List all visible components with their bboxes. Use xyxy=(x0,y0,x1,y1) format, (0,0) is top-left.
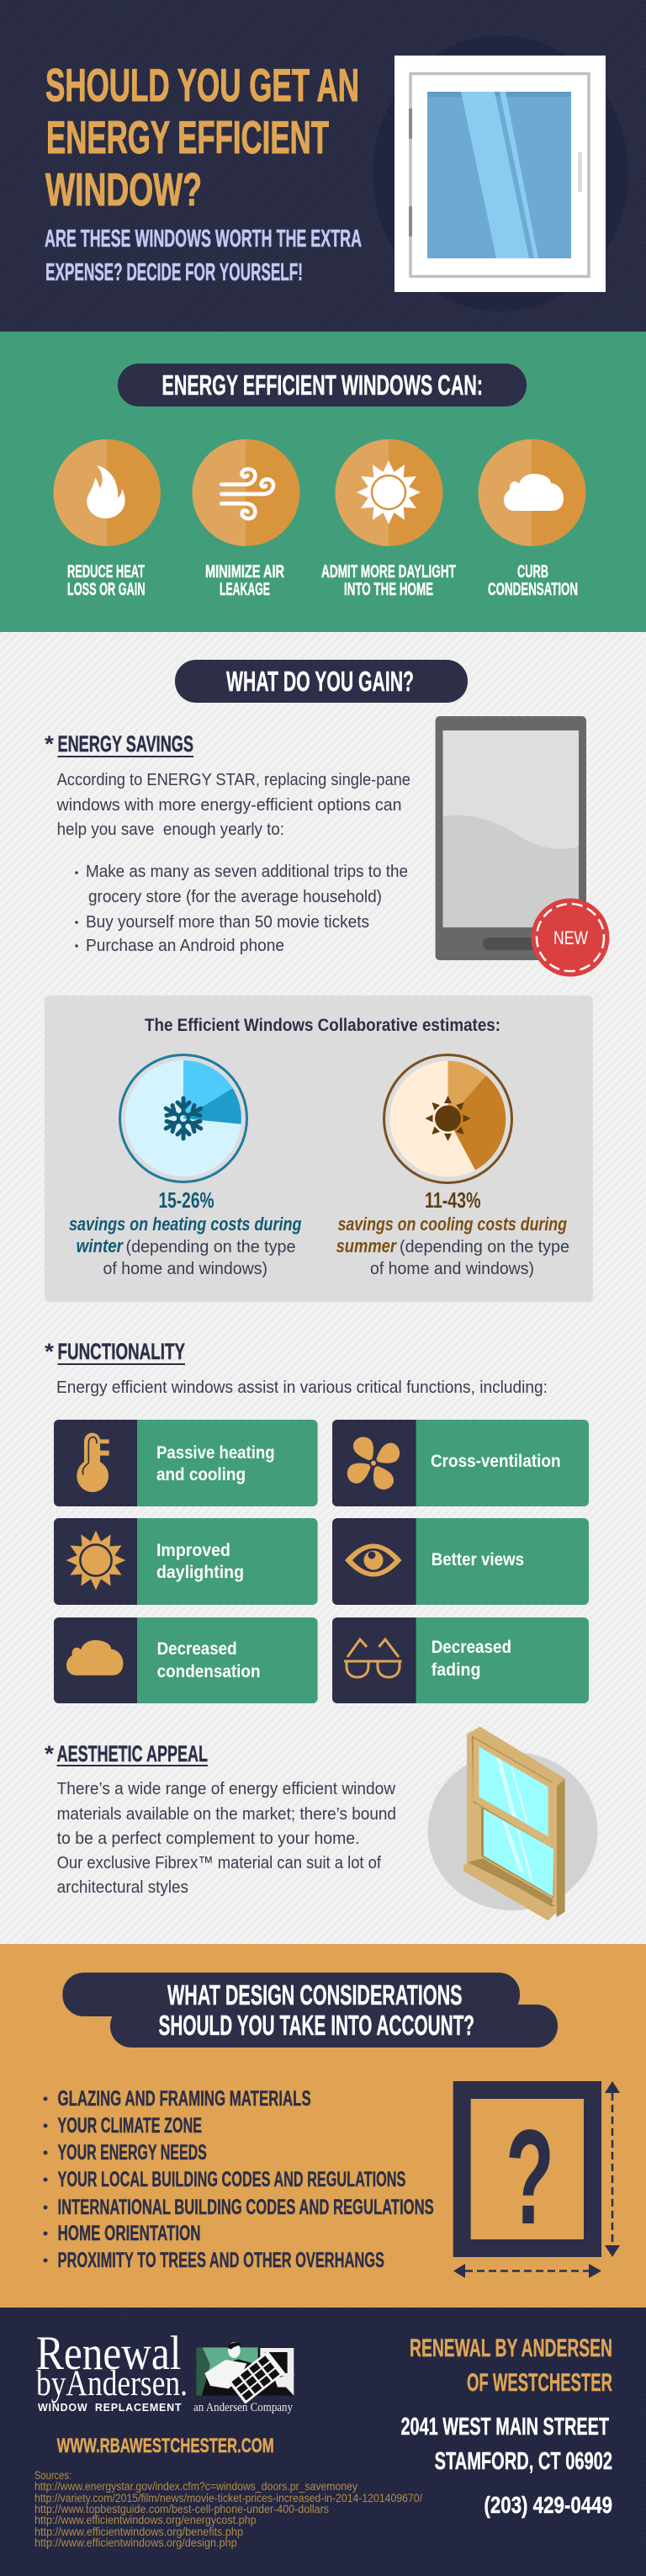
badge: new xyxy=(532,899,609,976)
card: decreased fading: fading xyxy=(432,1660,481,1680)
sources: http://www.efficientwindows.org/energycost.php xyxy=(34,2514,257,2526)
card: improved daylighting: daylighting xyxy=(156,1563,244,1582)
label: reduce heat xyxy=(67,562,145,599)
heading pill: WHAT DESIGN CONSIDERATIONS xyxy=(167,1979,463,2010)
list: savings xyxy=(75,862,408,955)
text: summer savings: savings on cooling costs during xyxy=(338,1214,567,1235)
phone number: (203) 429-0449 xyxy=(484,2492,612,2518)
card: improved daylighting xyxy=(54,1518,318,1605)
heading: aesthetic appeal: * xyxy=(45,1741,55,1766)
panel: estimates xyxy=(45,996,593,1302)
list: savings: Buy yourself more than 50 movie tickets xyxy=(86,912,369,932)
text: winter savings: savings on heating costs during xyxy=(69,1214,302,1235)
estimates title: The Efficient Windows Collaborative estimates: xyxy=(145,1016,500,1035)
icon: sun xyxy=(426,1096,471,1141)
list: considerations: YOUR CLIMATE ZONE xyxy=(57,2114,202,2138)
logo: renewal by andersen: byAndersen. xyxy=(36,2364,188,2403)
logo: renewal by andersen: Renewal xyxy=(36,2327,182,2380)
panel: what do you gain xyxy=(0,632,646,1944)
text: winter savings xyxy=(69,1187,302,1278)
heading: energy savings: ENERGY SAVINGS xyxy=(57,731,193,757)
chart: winter gauge xyxy=(119,1055,247,1182)
text: winter savings: of home and windows) xyxy=(103,1259,267,1278)
sources: http://variety.com/2015/film/news/movie-ticket-prices-increased-in-2014-1201409670/ xyxy=(34,2492,422,2504)
heading pill xyxy=(118,364,527,406)
heading pill xyxy=(62,1973,558,2048)
icon: flame xyxy=(54,439,161,546)
title xyxy=(45,59,359,215)
icon: wind xyxy=(193,439,299,546)
card: cross-ventilation xyxy=(332,1420,589,1506)
panel: footer xyxy=(0,2308,646,2576)
icon: fan xyxy=(347,1437,400,1490)
label: minimize air xyxy=(205,562,284,599)
sources: http://www.topbestguide.com/best-cell-phone-under-400-dollars xyxy=(34,2503,329,2515)
label: admit daylight: ADMIT MORE DAYLIGHT xyxy=(321,562,456,582)
heading: functionality xyxy=(45,1339,185,1365)
arrow: horizontal dimension xyxy=(453,2264,601,2278)
list: considerations: GLAZING AND FRAMING MATERIALS xyxy=(57,2087,311,2111)
card: decreased fading: Decreased xyxy=(432,1638,511,1657)
list: considerations: YOUR LOCAL BUILDING CODES AND REGULATIONS xyxy=(57,2168,405,2191)
sources xyxy=(34,2469,422,2549)
icon: snowflake xyxy=(163,1098,204,1139)
chart: summer gauge xyxy=(384,1055,511,1183)
text: winter savings: (depending on the type xyxy=(126,1237,296,1256)
text: summer savings: 11-43% xyxy=(425,1187,481,1213)
list: considerations xyxy=(44,2087,434,2272)
card: better views xyxy=(332,1518,589,1605)
logo: renewal by andersen: WINDOW REPLACEMENT xyxy=(38,2402,182,2414)
text: aesthetic appeal: Our exclusive Fibrex™ material can suit a lot of xyxy=(57,1853,381,1872)
title: SHOULD YOU GET AN xyxy=(45,59,359,111)
panel: header xyxy=(0,0,646,332)
heading pill xyxy=(175,660,468,703)
label: reduce heat: LOSS OR GAIN xyxy=(67,580,145,599)
icon: glasses xyxy=(344,1639,402,1677)
heading: aesthetic appeal xyxy=(45,1741,208,1766)
address xyxy=(400,2414,612,2475)
icon: window with question mark xyxy=(462,2090,592,2252)
sources: Sources: xyxy=(34,2469,71,2482)
icon: sun xyxy=(66,1531,125,1590)
label: curb condensation xyxy=(488,562,578,599)
label: minimize air: LEAKAGE xyxy=(220,580,270,599)
icon: eye xyxy=(345,1543,402,1577)
icon: window with question mark: ? xyxy=(506,2101,554,2252)
text: energy savings intro: help you save enough yearly to: xyxy=(57,820,284,839)
subtitle xyxy=(45,226,362,286)
logo: andersen illustration xyxy=(196,2342,294,2404)
sources: http://www.energystar.gov/index.cfm?c=windows_doors.pr_savemoney xyxy=(34,2480,357,2493)
heading: functionality: FUNCTIONALITY xyxy=(57,1339,185,1364)
card: better views: Better views xyxy=(432,1550,524,1570)
subtitle: EXPENSE? DECIDE FOR YOURSELF! xyxy=(45,259,303,286)
text: functionality intro: Energy efficient windows assist in various critical functions, including: xyxy=(56,1378,548,1397)
label: curb condensation: CONDENSATION xyxy=(488,580,578,599)
text: energy savings intro xyxy=(56,770,410,839)
text: aesthetic appeal: materials available on the market; there’s bound xyxy=(57,1804,396,1824)
text: aesthetic appeal xyxy=(57,1779,396,1897)
title: WINDOW? xyxy=(45,163,202,215)
icon: window xyxy=(373,35,628,311)
logo: renewal by andersen xyxy=(36,2327,188,2414)
heading: aesthetic appeal: AESTHETIC APPEAL xyxy=(57,1741,208,1766)
sources: http://www.efficientwindows.org/benefits.php xyxy=(34,2526,243,2538)
card: decreased fading xyxy=(332,1617,589,1703)
card: passive heating: Passive heating xyxy=(156,1443,275,1463)
website: WWW.RBAWESTCHESTER.COM xyxy=(57,2435,274,2457)
heading pill: ENERGY EFFICIENT WINDOWS CAN: xyxy=(162,369,483,401)
heading: functionality: * xyxy=(45,1339,55,1364)
card: improved daylighting: Improved xyxy=(156,1541,230,1560)
panel: design considerations xyxy=(0,1944,646,2308)
text: summer savings: summer xyxy=(336,1235,397,1256)
text: summer savings: (depending on the type xyxy=(400,1237,569,1256)
label: admit daylight: INTO THE HOME xyxy=(344,580,433,599)
arrow: vertical dimension xyxy=(605,2081,620,2257)
list: savings: Purchase an Android phone xyxy=(86,936,284,955)
list: considerations: YOUR ENERGY NEEDS xyxy=(57,2141,207,2164)
icon: isometric window xyxy=(427,1727,597,1920)
label: minimize air: MINIMIZE AIR xyxy=(205,562,284,582)
badge: new: NEW xyxy=(553,927,588,948)
text: summer savings: of home and windows) xyxy=(370,1259,534,1278)
icon: cloud xyxy=(66,1640,123,1676)
card: decreased condensation: condensation xyxy=(157,1662,261,1681)
text: aesthetic appeal: There’s a wide range of energy efficient window xyxy=(57,1779,395,1798)
title: ENERGY EFFICIENT xyxy=(46,111,329,163)
panel: energy efficient windows can xyxy=(0,332,646,632)
card: passive heating xyxy=(54,1420,318,1506)
heading: energy savings: * xyxy=(45,731,55,757)
label: admit daylight xyxy=(321,562,456,599)
list: considerations: INTERNATIONAL BUILDING CODES AND REGULATIONS xyxy=(57,2196,434,2219)
card: passive heating: and cooling xyxy=(156,1465,246,1485)
label: reduce heat: REDUCE HEAT xyxy=(67,562,145,582)
text: an andersen company: an Andersen Company xyxy=(193,2401,293,2414)
text: summer savings xyxy=(336,1187,569,1278)
company name xyxy=(410,2334,612,2397)
list: considerations: PROXIMITY TO TREES AND OTHER OVERHANGS xyxy=(57,2249,384,2272)
text: aesthetic appeal: architectural styles xyxy=(57,1878,188,1897)
text: winter savings: 15-26% xyxy=(158,1187,214,1213)
icon: thermometer xyxy=(77,1433,109,1492)
heading pill: SHOULD YOU TAKE INTO ACCOUNT? xyxy=(158,2010,474,2041)
list: savings: Make as many as seven additional trips to the xyxy=(86,862,408,881)
icon: sun xyxy=(335,439,442,546)
sources: http://www.efficientwindows.org/design.php xyxy=(34,2536,237,2549)
heading: energy savings xyxy=(45,731,193,757)
card: decreased condensation xyxy=(54,1617,318,1703)
list: considerations: HOME ORIENTATION xyxy=(57,2222,200,2245)
icon: phone xyxy=(436,716,586,960)
subtitle: ARE THESE WINDOWS WORTH THE EXTRA xyxy=(45,226,362,252)
heading pill: WHAT DO YOU GAIN? xyxy=(226,666,414,697)
text: aesthetic appeal: to be a perfect complement to your home. xyxy=(57,1829,359,1848)
card: cross-ventilation: Cross-ventilation xyxy=(431,1452,560,1471)
text: energy savings intro: windows with more energy-efficient options can xyxy=(56,795,402,815)
label: curb condensation: CURB xyxy=(517,562,548,582)
icon: cloud xyxy=(478,439,585,546)
text: winter savings: winter xyxy=(77,1235,124,1256)
text: energy savings intro: According to ENERGY STAR, replacing single-pane xyxy=(57,770,410,789)
card: decreased condensation: Decreased xyxy=(157,1639,237,1659)
list: savings: grocery store (for the average household) xyxy=(88,887,382,906)
